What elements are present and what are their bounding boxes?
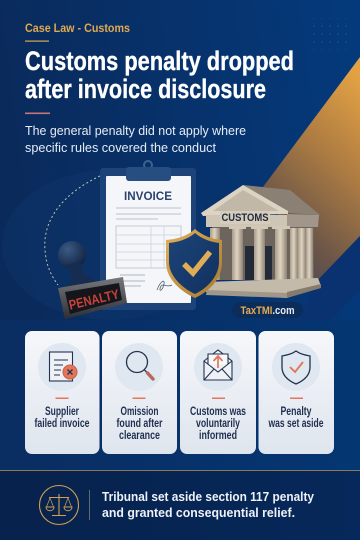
footer message: and granted consequential relief. bbox=[102, 505, 295, 520]
clipboard with invoice bbox=[100, 161, 196, 310]
TaxTMI.com badge: TaxTMI.com bbox=[240, 305, 295, 317]
caption bbox=[116, 406, 163, 442]
icon: invoice with x bbox=[50, 352, 77, 381]
subtitle: specific rules covered the conduct bbox=[25, 140, 216, 155]
title: Customs penalty dropped bbox=[25, 46, 294, 76]
footer message: Tribunal set aside section 117 penalty bbox=[102, 489, 315, 504]
caption: Penalty bbox=[280, 406, 312, 418]
caption: informed bbox=[199, 430, 237, 442]
card: supplier failed invoice bbox=[25, 331, 100, 454]
caption bbox=[268, 406, 324, 430]
caption: Customs was bbox=[190, 406, 246, 418]
dotted arc bbox=[45, 176, 100, 285]
title: after invoice disclosure bbox=[25, 74, 266, 104]
caption: failed invoice bbox=[34, 418, 90, 430]
customs building bbox=[201, 185, 321, 298]
subtitle bbox=[25, 123, 246, 155]
caption bbox=[34, 406, 90, 430]
title bbox=[25, 46, 294, 104]
penalty stamp bbox=[58, 241, 127, 319]
card: omission found after clearance bbox=[102, 331, 177, 454]
footer panel bbox=[0, 470, 360, 540]
caption: clearance bbox=[119, 430, 160, 442]
caption: Omission bbox=[120, 406, 158, 418]
subtitle: The general penalty did not apply where bbox=[25, 123, 246, 138]
caption: found after bbox=[116, 418, 163, 430]
icon: magnifier bbox=[126, 352, 153, 379]
caption bbox=[190, 406, 246, 442]
icon: shield with check bbox=[282, 351, 310, 384]
caption: Supplier bbox=[45, 406, 79, 418]
eyebrow: Case Law - Customs: Case Law - Customs bbox=[25, 21, 130, 35]
building label bbox=[220, 211, 270, 224]
footer message bbox=[102, 489, 315, 520]
icon: envelope with arrow bbox=[204, 350, 232, 380]
shield with check bbox=[166, 229, 222, 298]
invoice heading: INVOICE bbox=[124, 189, 172, 203]
caption: was set aside bbox=[268, 418, 324, 430]
caption: voluntarily bbox=[196, 418, 240, 430]
card: customs was voluntarily informed bbox=[180, 331, 256, 454]
customs building: CUSTOMS bbox=[222, 212, 268, 224]
card: penalty was set aside bbox=[258, 331, 334, 454]
TaxTMI.com badge bbox=[232, 302, 303, 318]
icon: scales of justice bbox=[40, 486, 78, 524]
stamp label: PENALTY bbox=[67, 287, 121, 313]
